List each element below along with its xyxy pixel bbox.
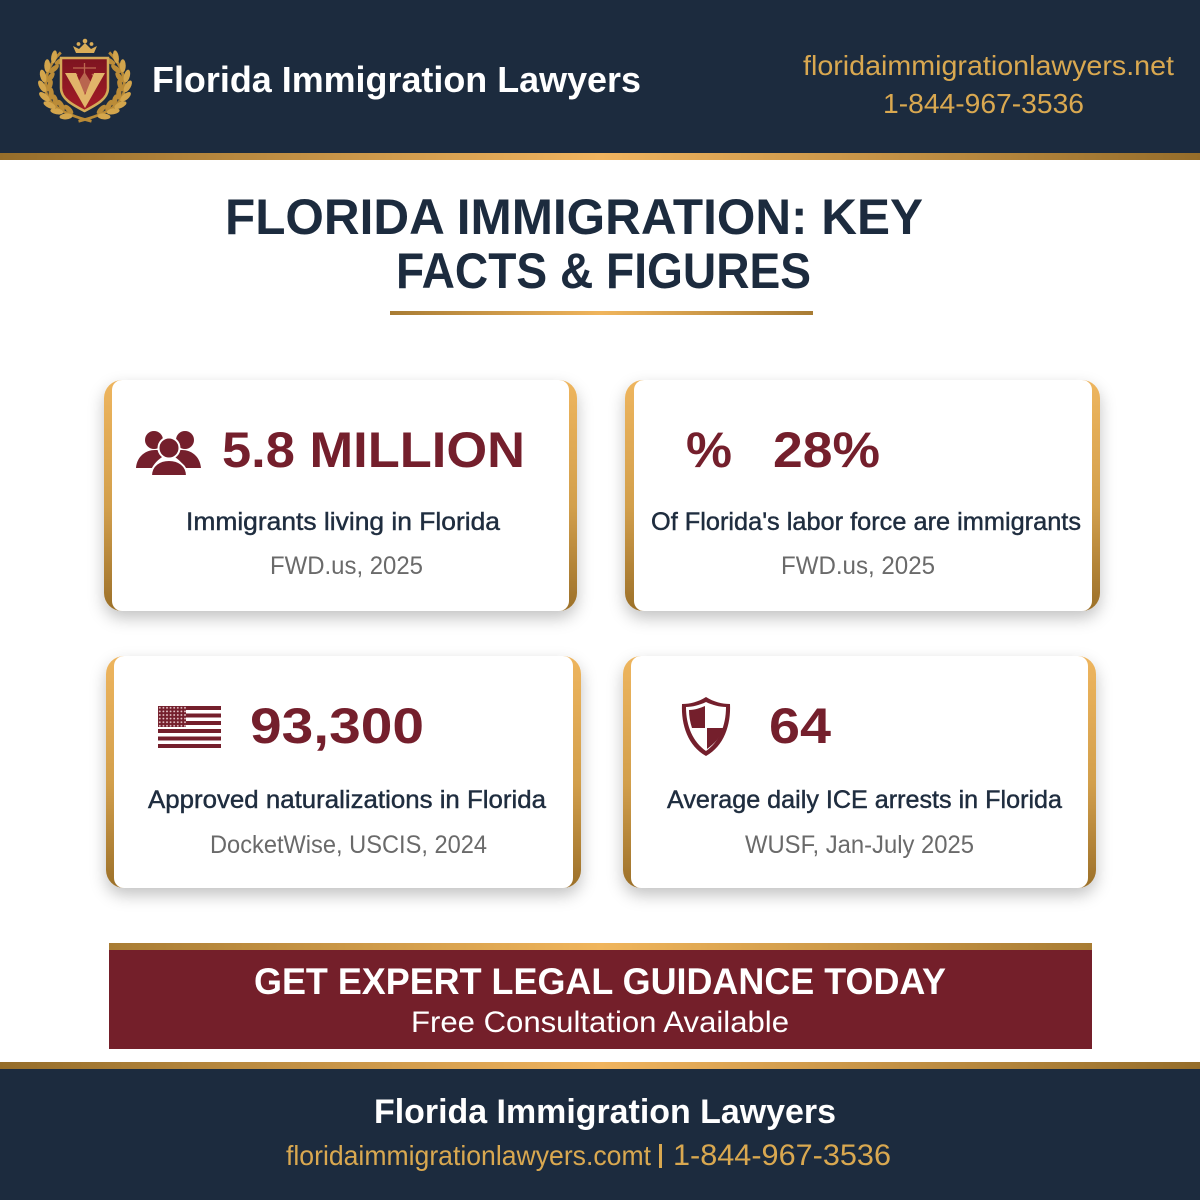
icon: flag — [158, 706, 221, 748]
panel: 5.8 million — [104, 380, 577, 611]
call to action subheading: Free Consultation Available — [411, 1006, 789, 1039]
icon: shield — [682, 697, 730, 756]
header contact: floridaimmigrationlawyers.net — [803, 50, 1174, 81]
icon: percent: % — [686, 422, 732, 478]
icon: right laurel branch — [78, 50, 134, 121]
stat: 93,300 — [250, 698, 424, 754]
stat: 5.8 MILLION — [222, 422, 525, 478]
call to action banner — [109, 943, 1092, 1049]
footer contact — [286, 1139, 891, 1172]
logo crest — [36, 39, 134, 121]
source: WUSF, Jan-July 2025 — [745, 831, 974, 859]
stat: 28% — [773, 422, 880, 478]
source: FWD.us, 2025 — [781, 552, 935, 580]
title — [225, 189, 923, 299]
icon: people — [136, 431, 201, 476]
header band — [0, 0, 1200, 160]
header contact — [803, 50, 1174, 119]
description: Of Florida's labor force are immigrants — [651, 508, 1081, 536]
icon: left laurel branch — [36, 50, 92, 121]
panel: 93,300 — [106, 656, 581, 888]
source: FWD.us, 2025 — [270, 552, 423, 580]
panel: 28 percent — [625, 380, 1100, 611]
description: Immigrants living in Florida — [186, 508, 500, 536]
header company name: Florida Immigration Lawyers — [152, 59, 641, 100]
panel: 64 — [623, 656, 1096, 888]
footer contact: 1-844-967-3536 — [673, 1139, 891, 1172]
icon: rosette — [77, 72, 92, 94]
title underline — [390, 311, 813, 315]
description: Average daily ICE arrests in Florida — [667, 786, 1062, 814]
icon: scales — [71, 63, 98, 82]
footer company name: Florida Immigration Lawyers — [374, 1093, 836, 1131]
icon: shield — [61, 58, 108, 111]
icon: gold V — [65, 73, 105, 108]
footer contact: floridaimmigrationlawyers.comt — [286, 1140, 651, 1171]
call to action heading: GET EXPERT LEGAL GUIDANCE TODAY — [254, 961, 946, 1002]
source: DocketWise, USCIS, 2024 — [210, 831, 487, 859]
stat: 64 — [769, 698, 831, 754]
icon: crown — [73, 39, 97, 53]
header contact: 1-844-967-3536 — [883, 88, 1084, 119]
footer band — [0, 1062, 1200, 1200]
description: Approved naturalizations in Florida — [148, 786, 546, 814]
title: FACTS & FIGURES — [396, 243, 811, 299]
title: FLORIDA IMMIGRATION: KEY — [225, 189, 923, 245]
